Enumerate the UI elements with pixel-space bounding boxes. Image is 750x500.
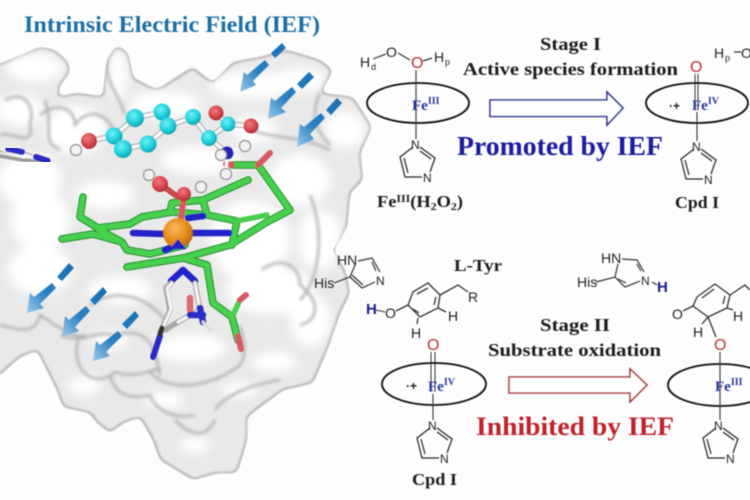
distal histidine left [314,252,385,291]
L-Tyr substrate [366,256,503,341]
stage II reactant: Cpd I: O [427,337,439,354]
inhibited label: Inhibited by IEF [476,412,674,441]
peroxide group: p [445,57,450,67]
imidazole: N [726,452,735,466]
distal histidine right, protonated: His [577,274,597,290]
peroxide group: H [434,49,444,65]
name: ) [457,192,463,211]
Fe label: Fe [428,379,444,395]
name: Fe [377,192,395,211]
promoted label: Promoted by IEF [457,131,663,161]
cyclohexadienone [672,284,750,340]
iron atom [163,218,193,249]
cyclohexadienone: H [733,308,743,324]
heme nitrogen bonds [133,216,229,281]
porphyrin ellipse [382,363,486,405]
peroxide group: O [411,55,423,72]
stage II reactant: Cpd I [382,337,486,489]
red ends [160,153,270,349]
stage I reactant: FeIII(H2O2) [360,44,469,213]
imidazole [417,419,452,466]
distal histidine right, protonated [577,250,668,296]
name: 2 [431,201,437,213]
Fe label: Fe [692,98,708,114]
oxo group: p [725,53,730,63]
stage I heading: Stage I [540,34,601,54]
stage I product: Cpd I: ·+ [669,99,680,113]
L-Tyr substrate: R [468,289,478,305]
distal histidine left: N [376,274,385,288]
name: O [437,192,451,211]
title: Intrinsic Electric Field (IEF) [24,12,320,37]
stage II heading [488,315,661,360]
L-Tyr substrate: L-Tyr [454,256,503,275]
imidazole: N [692,140,701,154]
tyrosine ligand ball and stick [70,104,258,201]
stage I heading: Active species formation [463,59,678,79]
imidazole [703,419,738,466]
cyclohexadienone: O [672,306,683,322]
stage I heading [463,34,678,79]
oxo group: H [714,45,724,61]
imidazole: N [428,419,437,433]
distal histidine right, protonated: H [657,279,668,296]
name: 2 [451,201,457,213]
oxo group: O [690,59,702,76]
Fe label: III [428,96,440,107]
name: (H [410,192,431,211]
porphyrin ellipse [646,83,748,123]
name: Cpd I [675,193,719,212]
stage II heading: Substrate oxidation [488,340,661,360]
peroxide group [360,44,450,72]
oxo group [690,45,750,110]
L-Tyr substrate: O [385,305,396,321]
Fe label: IV [708,96,720,107]
peroxide group: d [371,62,376,72]
porphyrin ellipse [668,364,750,406]
field arrows lower left [27,263,139,361]
porphyrin ellipse [367,83,469,123]
stage II product: FeIII intermediate: O [714,337,726,354]
imidazole: N [411,138,420,152]
left histidine fragment [0,149,48,161]
proximal histidine sticks [153,283,210,357]
name: III [396,193,410,205]
Fe label: Fe [715,379,731,395]
imidazole [400,138,435,185]
distal histidine right, protonated: HN [601,250,621,266]
imidazole: N [704,173,713,187]
arrow: stage II [509,369,647,402]
peroxide group: H [360,54,370,70]
imidazole: N [714,419,723,433]
stage I product: Cpd I [646,45,750,212]
Fe label: Fe [412,98,428,114]
heme and propionate sticks [62,153,290,349]
stage II product: FeIII intermediate [668,284,750,466]
L-Tyr substrate: H [366,301,377,318]
stage II heading: Stage II [540,315,610,335]
distal histidine right, protonated: N [641,274,650,288]
field arrows upper right [240,43,342,147]
imidazole [681,140,716,187]
name: Cpd I [412,470,457,489]
peroxide group: O [386,44,397,60]
distal histidine left: HN [337,252,357,268]
arrow: stage I [490,92,623,125]
stage II reactant: Cpd I: ·+ [406,379,417,393]
cyclohexadienone: H [693,324,703,340]
L-Tyr substrate: H [448,308,458,324]
Fe label: IV [444,377,456,388]
imidazole: N [423,171,432,185]
protein surface [0,45,372,480]
distal histidine left: His [314,275,334,291]
imidazole: N [440,452,449,466]
Fe label: III [731,377,743,388]
L-Tyr substrate: H [411,325,421,341]
